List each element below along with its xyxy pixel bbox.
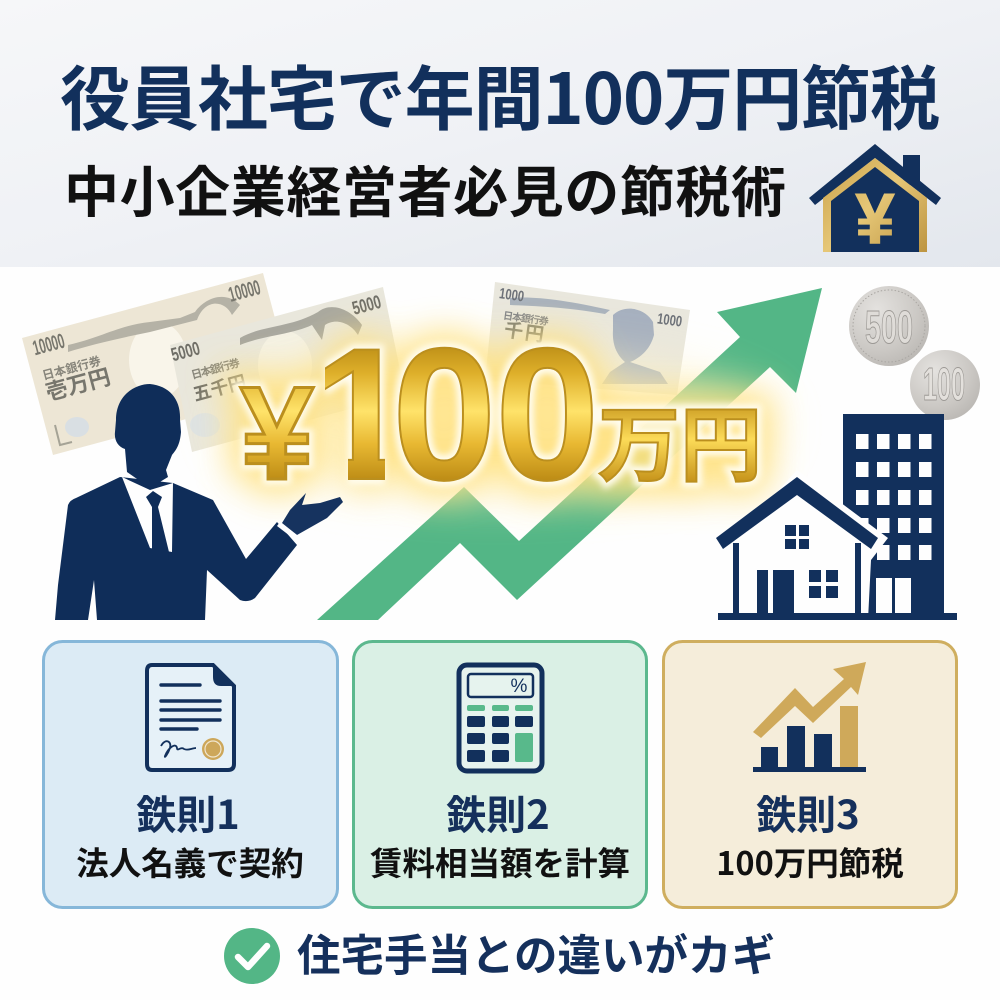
head [115,384,181,488]
office building [843,414,944,620]
businessman silhouette [55,384,343,620]
subtitle: 中小企業経営者必見の節税術 [64,148,786,228]
banknote: 10000 yen [22,273,294,455]
banknote: 5000 yen: 日本銀行券 [189,354,242,383]
icon: contract document [147,664,236,770]
coin: 100: 100 [923,358,965,410]
coin: 500 [849,286,929,366]
banknote: 1000 yen: 千円 [502,315,546,348]
banknote: 5000 yen: 五千円 [190,368,249,407]
banknote: 1000 yen: 1000 [498,285,525,305]
tie [146,491,169,560]
description: 法人名義で契約 [76,838,304,885]
amount: ¥100万円: 1 [309,309,414,519]
amount: ¥100万円: 0 [495,309,600,519]
panel: rule 2 [354,642,646,908]
amount: ¥100万円: ¥ [240,360,314,508]
amount: ¥100万円 [229,338,766,492]
suit [55,477,297,620]
coin: 500: 500 [865,301,913,353]
banknote: 1000 yen: 1000 [656,310,683,331]
panel: rule 1 [44,642,338,908]
amount: ¥100万円: 万円 [598,379,762,498]
amount: ¥100万円: 0 [392,309,497,519]
icon: calculator [459,665,542,771]
glow behind amount: 万円 [598,379,762,498]
banknotes [22,273,690,455]
hand [282,493,343,535]
amount: ¥100万円: ¥ [240,360,314,508]
banknote: 1000 yen [485,282,690,395]
heading: 鉄則1 [136,783,240,841]
glow behind amount: 0 [392,309,497,519]
house [716,470,957,620]
banknote: 1000 yen: 日本銀行券 [502,307,550,328]
amount: ¥100万円: 1 [309,309,414,519]
coin: 100 [910,350,980,420]
bottom caption: 住宅手当との違いがカギ [297,921,775,984]
glow behind amount: 0 [495,309,600,519]
heading: 鉄則2 [446,783,550,841]
amount: ¥100万円: 0 [392,309,497,519]
panel: rule 3 [664,642,956,908]
growth arrow [317,288,822,620]
ground line [718,613,957,620]
shirt [122,477,173,552]
banknote: 5000 yen [169,287,405,452]
header band [0,0,1000,267]
amount: ¥100万円: 万円 [598,379,762,498]
heading: 鉄則3 [756,783,860,841]
title: 役員社宅で年間100万円節税 [60,44,940,145]
banknote: 5000 yen: 5000 [350,292,384,320]
glow behind amount: 1 [309,309,414,519]
banknote: 10000 yen: 10000 [30,330,67,360]
amount: ¥100万円: 0 [495,309,600,519]
glow behind amount [225,309,775,519]
banknote: 5000 yen: 5000 [169,338,202,366]
description: 100万円節税 [716,838,904,885]
banknote: 10000 yen: 壱万円 [42,359,114,407]
icon: check mark [224,928,280,984]
glow behind amount: ¥ [240,360,314,508]
banknote: 10000 yen: 日本銀行券 [40,352,103,384]
cuff [277,522,297,539]
icon: rising bar chart [753,662,866,772]
icon: house with yen [809,144,941,259]
icon: calculator: % [511,676,528,697]
icon: house with yen: ¥ [855,180,895,259]
banknote: 10000 yen: 10000 [226,276,263,307]
description: 賃料相当額を計算 [370,838,630,885]
